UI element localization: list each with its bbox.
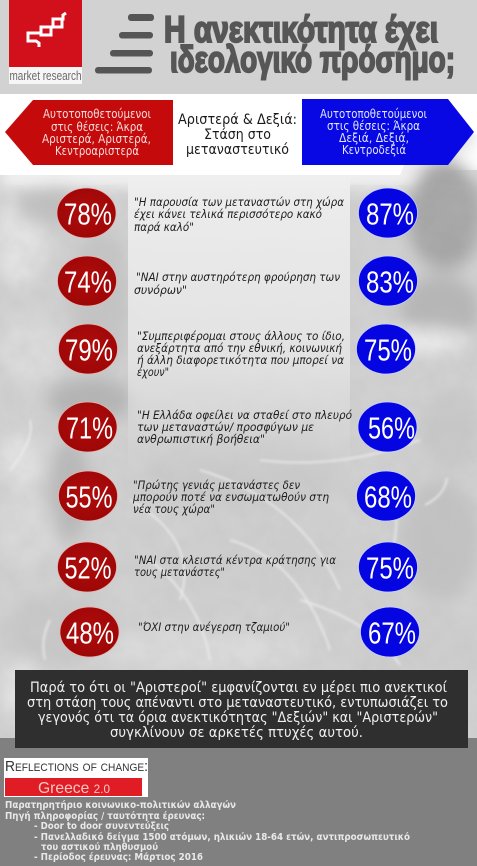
logo: reflections of change: Reflections of change:: [5, 758, 148, 775]
row 2: συνόρων": [134, 283, 187, 297]
arrow: right-wing respondents: [302, 99, 474, 165]
heading: left and right: μεταναστευτικό: [186, 142, 289, 158]
row 2: [58, 256, 418, 306]
arrow: right-wing respondents: Αυτοτοποθετούμενοι: [320, 107, 427, 121]
row 4: 71%: [66, 410, 113, 446]
row 1: έχει κάνει τελικά περισσότερο κακό: [134, 207, 322, 221]
arrow: left-wing respondents: στις θέσεις: Άκρα: [51, 120, 143, 134]
row 3: ανεξάρτητα από την εθνική, κοινωνική: [137, 341, 343, 355]
row 5: "Πρώτης γενιάς μετανάστες δεν: [133, 478, 301, 492]
row 4: 56%: [368, 410, 415, 446]
row 3: "Συμπεριφέρομαι στους άλλους το ίδιο,: [137, 329, 345, 343]
icon: stairs: [28, 13, 66, 47]
row 4: ανθρωπιστική βοήθεια": [137, 432, 265, 446]
row 5: νέα τους χώρα": [133, 502, 215, 516]
arrow: left-wing respondents: Αριστερά, Αριστερά,: [42, 132, 151, 146]
row 5: 55%: [66, 480, 112, 514]
arrow: left-wing respondents: Αυτοτοποθετούμενοι: [43, 107, 151, 121]
row 5: μπορούν ποτέ να ενσωματωθούν στη: [132, 490, 329, 504]
heading: left and right: Στάση στο: [204, 127, 271, 143]
row 6: "ΝΑΙ στα κλειστά κέντρα κράτησης για: [134, 553, 336, 567]
source text: [5, 799, 410, 863]
source text: - Door to door συνεντεύξεις: [34, 820, 169, 832]
row 1: παρά καλό": [134, 220, 194, 234]
row 7: 48%: [66, 616, 114, 650]
row 1: [57, 188, 418, 238]
footer background: [0, 738, 477, 866]
row 6: τους μετανάστες": [134, 565, 225, 579]
title: [164, 9, 455, 80]
row 6: 75%: [366, 550, 414, 586]
source text: Πηγή πληροφορίας / ταυτότητα έρευνας:: [5, 810, 205, 822]
heading: left and right: [178, 112, 297, 158]
row 1: "Η παρουσία των μεταναστών στη χώρα: [134, 195, 344, 209]
row 3: 79%: [65, 332, 113, 368]
row 2: "ΝΑΙ στην αυστηρότερη φρούρηση των: [136, 270, 341, 284]
row 3: έχουν": [137, 365, 169, 379]
icon: title bars: [95, 14, 154, 74]
white header band: [0, 93, 477, 175]
arrow: right-wing respondents: Δεξιά, Δεξιά,: [339, 131, 409, 145]
row 1: 87%: [366, 196, 414, 232]
panel: statements backdrop: [128, 176, 350, 476]
row 7: "ΌΧΙ στην ανέγερση τζαμιού": [138, 620, 290, 634]
panel: conclusion: συγκλίνουν σε αρκετές πτυχές αυτού.: [110, 725, 363, 741]
row 4: [58, 402, 417, 452]
arrow: right-wing respondents: στις θέσεις: Άκρα: [327, 119, 420, 133]
arrow: left-wing respondents: [5, 100, 173, 165]
row 6: 52%: [64, 550, 112, 586]
row 2: 83%: [366, 264, 414, 300]
heading: left and right: Αριστερά & Δεξιά:: [178, 112, 297, 128]
row 7: [60, 607, 420, 657]
logo: reflections of change: Greece 2.0: [38, 780, 110, 797]
row 3: [58, 324, 416, 379]
row 3: 75%: [364, 332, 412, 368]
row 5: [58, 471, 416, 521]
row 4: "Η Ελλάδα οφείλει να σταθεί στο πλευρό: [137, 408, 352, 422]
source text: Παρατηρητήριο κοινωνικο-πολιτικών αλλαγών: [5, 799, 236, 811]
panel: conclusion: [15, 670, 468, 748]
row 3: ή άλλη διαφορετικότητα που μπορεί να: [137, 353, 344, 367]
arrow: right-wing respondents: Κεντροδεξιά: [342, 143, 406, 157]
logo: market research: market research: [10, 68, 82, 83]
row 7: 67%: [368, 616, 416, 650]
row 5: 68%: [364, 480, 412, 514]
logo: reflections of change: [4, 758, 148, 797]
source text: - Περίοδος έρευνας: Μάρτιος 2016: [34, 851, 203, 863]
header strip: [0, 0, 477, 94]
background photo: [0, 107, 477, 740]
source text: του αστικού πληθυσμού: [41, 841, 158, 853]
row 4: των μεταναστών/ προσφύγων με: [137, 420, 314, 434]
logo: market research: [9, 0, 82, 84]
arrow: left-wing respondents: Κεντροαριστερά: [55, 144, 139, 158]
row 2: 74%: [64, 264, 112, 300]
source text: - Πανελλαδικό δείγμα 1500 ατόμων, ηλικιών 18-64 ετών, αντιπροσωπευτικό: [34, 831, 410, 843]
row 1: 78%: [64, 196, 112, 232]
row 6: [58, 542, 418, 592]
